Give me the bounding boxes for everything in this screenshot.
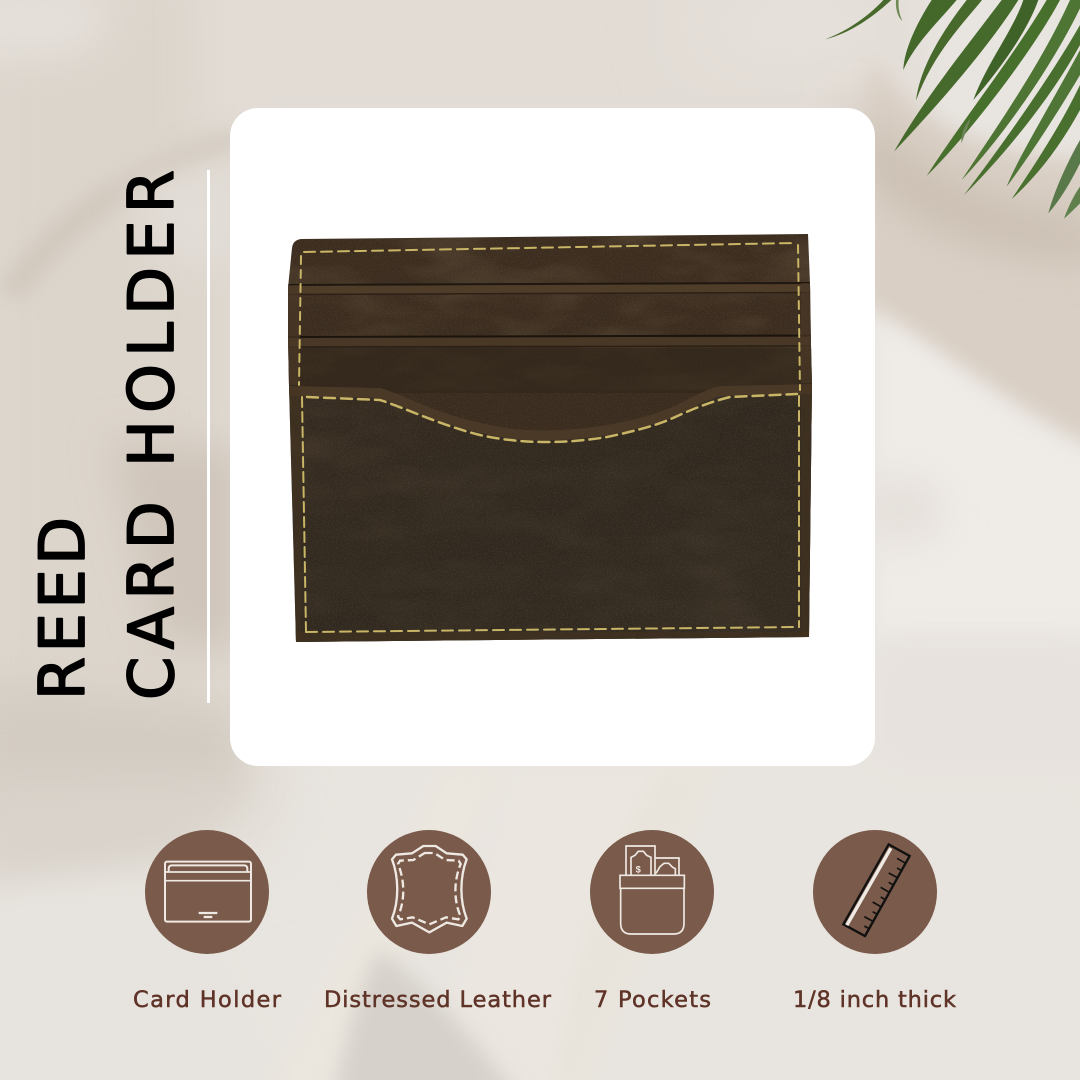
icon: card wallet	[165, 862, 251, 922]
icon: pocket with banknotes	[620, 846, 684, 934]
title: REED CARD HOLDER (rotated)	[26, 170, 188, 700]
wallet back body	[285, 230, 815, 646]
product photo: leather wallet	[285, 230, 815, 646]
pocket welt	[289, 389, 812, 435]
icon circle	[145, 830, 269, 954]
palm leaves, top right	[825, 0, 1080, 219]
title line: REED: REED	[26, 517, 99, 700]
icon: pocket with banknotes: $	[636, 865, 642, 875]
feature 4: thickness	[793, 830, 956, 1013]
feature 2: distressed leather	[324, 830, 552, 1013]
icon circle	[367, 830, 491, 954]
icon: ruler	[843, 844, 910, 936]
feature 1: card holder	[133, 830, 282, 1013]
feature 3: pockets	[590, 830, 714, 1013]
title divider line	[207, 170, 210, 703]
white product panel	[230, 108, 875, 766]
label: Card Holder	[133, 987, 282, 1013]
title line: CARD HOLDER: CARD HOLDER	[115, 170, 188, 700]
yellow stitching	[299, 243, 800, 632]
label: 1/8 inch thick	[793, 987, 956, 1013]
label: Distressed Leather	[324, 987, 552, 1013]
icon: leather hide	[392, 846, 467, 932]
wallet front pocket	[285, 380, 815, 645]
icon circle	[590, 830, 714, 954]
label: 7 Pockets	[594, 987, 711, 1013]
icon circle	[813, 830, 937, 954]
